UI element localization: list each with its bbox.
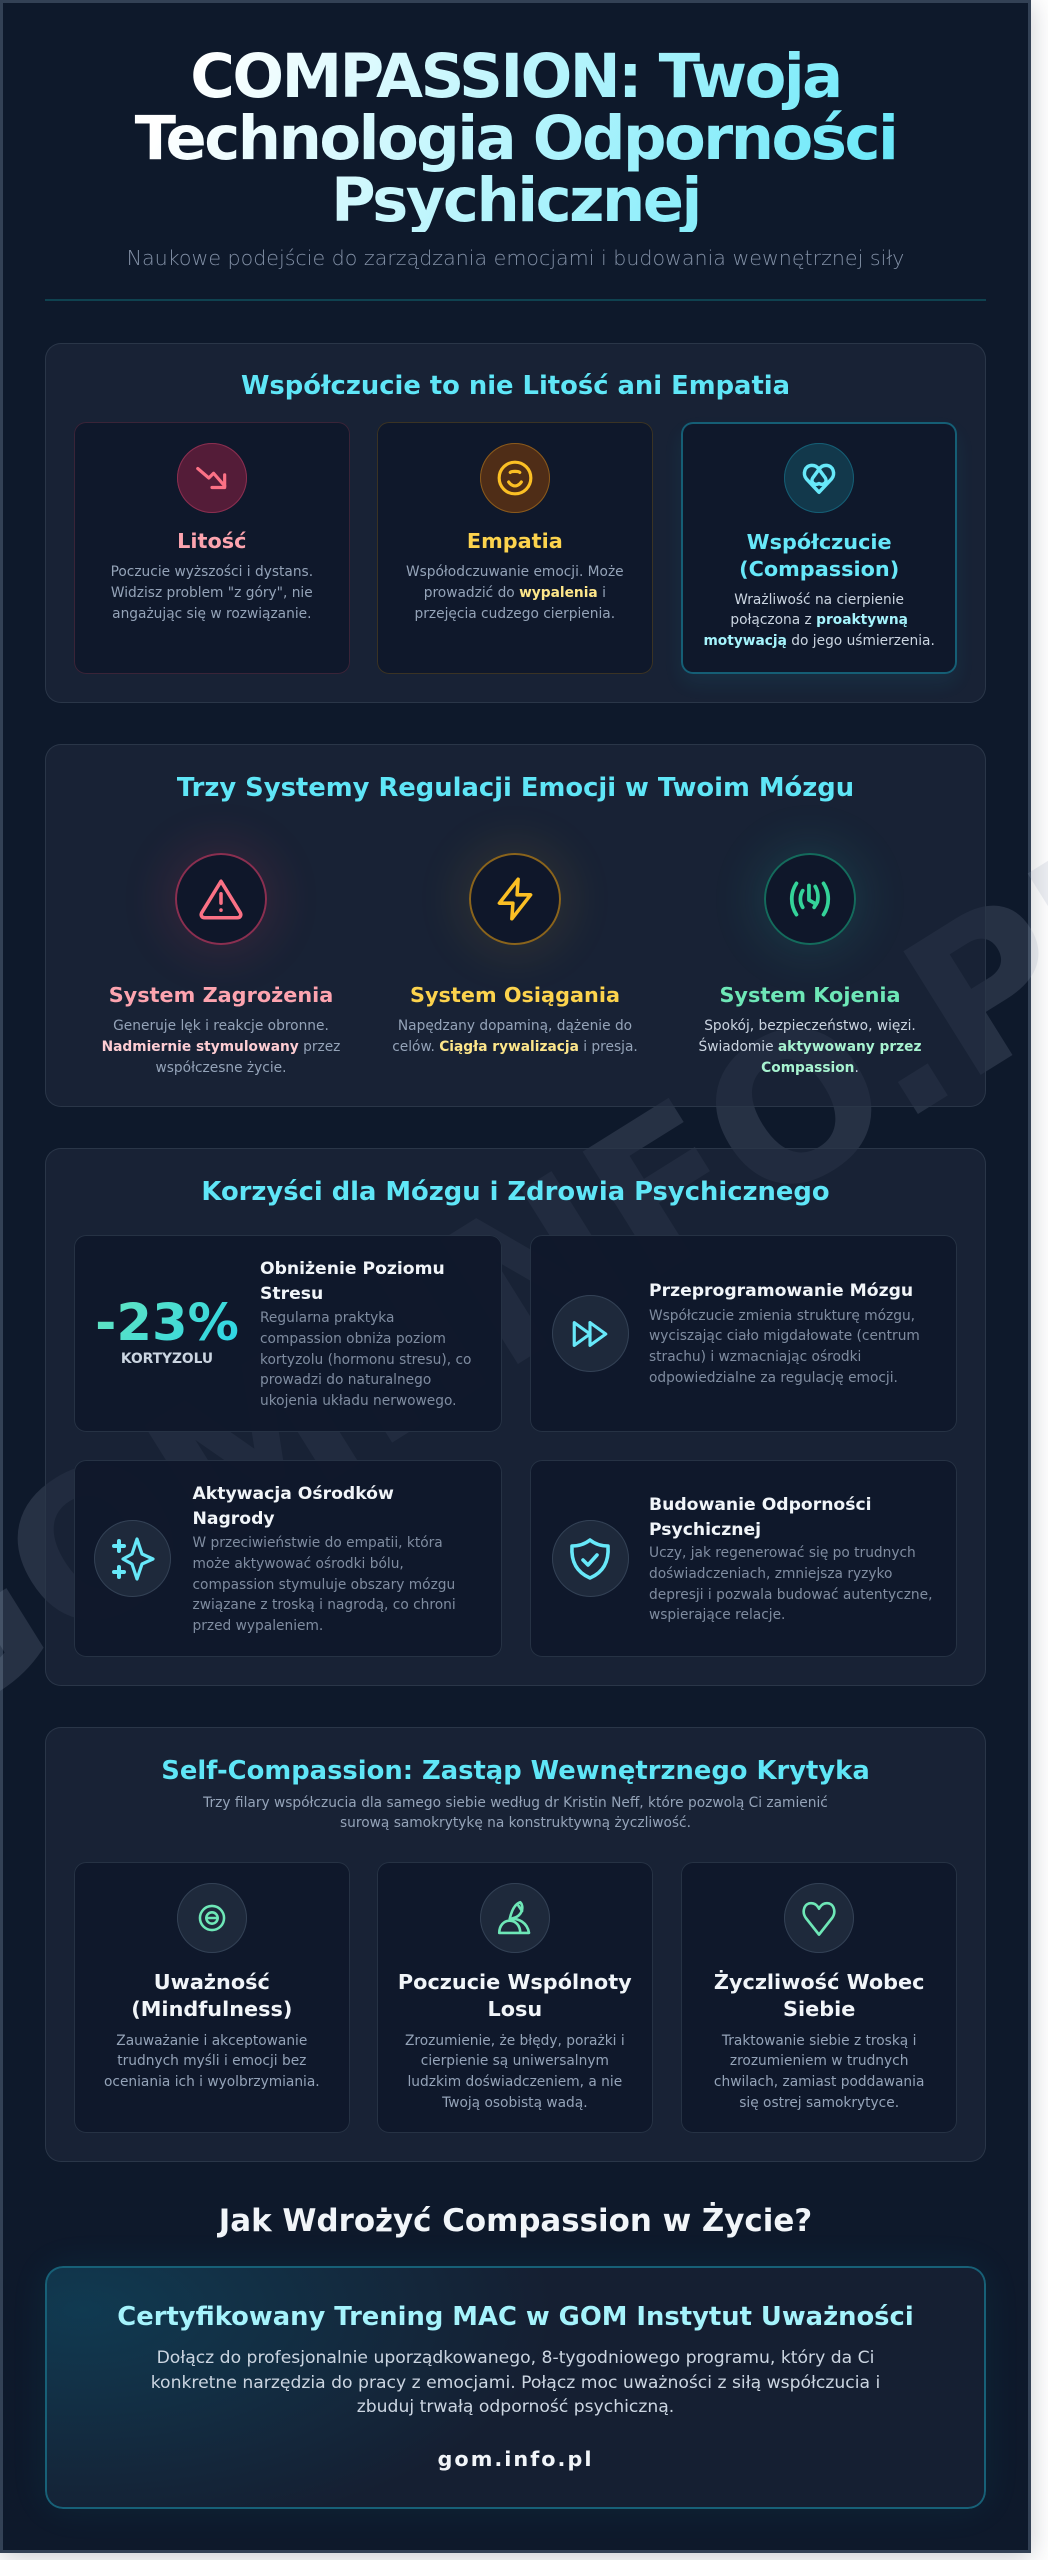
benefit title: Stresu <box>260 1284 323 1304</box>
panel heading: Trzy Systemy Regulacji Emocji w Twoim Mózgu <box>177 773 854 803</box>
panel: benefits for brain and mental health <box>45 1148 986 1686</box>
benefit: stress reduction <box>74 1235 502 1432</box>
icon: people together <box>480 1883 550 1953</box>
system text: celów. Ciągła rywalizacja i presja. <box>392 1039 638 1055</box>
card text: przejęcia cudzego cierpienia. <box>415 606 615 622</box>
benefit description: W przeciwieństwie do empatii, która <box>192 1535 443 1551</box>
header title: Psychicznej <box>331 166 700 236</box>
system text <box>102 1018 340 1076</box>
icon: smile <box>480 443 550 513</box>
card: common humanity <box>377 1862 653 2133</box>
benefit description: Regularna praktyka <box>260 1310 394 1326</box>
benefit text <box>649 1281 920 1386</box>
system title: System Zagrożenia <box>109 983 333 1007</box>
benefit title <box>649 1495 872 1540</box>
header title: COMPASSION: Twoja <box>190 42 841 112</box>
benefit: resilience <box>530 1460 957 1657</box>
cta text <box>151 2348 880 2417</box>
benefit description: compassion stymuluje obszary mózgu <box>192 1577 455 1593</box>
panel heading: Self-Compassion: Zastąp Wewnętrznego Krytyka <box>161 1756 870 1786</box>
benefit description <box>649 1545 932 1623</box>
card title: (Mindfulness) <box>131 1997 292 2021</box>
card text: Zauważanie i akceptowanie <box>116 2033 307 2049</box>
benefit text <box>192 1484 456 1634</box>
card title <box>714 1970 924 2021</box>
card: mindfulness <box>74 1862 350 2133</box>
benefit title <box>192 1484 394 1528</box>
panel intro text: surową samokrytykę na konstruktywną życzliwość. <box>340 1815 691 1831</box>
card: Litość <box>74 422 350 674</box>
panel heading: Korzyści dla Mózgu i Zdrowia Psychicznego <box>201 1177 830 1207</box>
card text: ludzkim doświadczeniem, a nie <box>407 2074 622 2090</box>
card text: cierpienie są uniwersalnym <box>421 2053 609 2069</box>
benefit text <box>260 1259 471 1409</box>
card text: chwilach, zamiast poddawania <box>714 2074 924 2090</box>
card title <box>739 530 899 581</box>
cta title: Certyfikowany Trening MAC w GOM Instytut Uważności <box>117 2302 914 2332</box>
cta link: gom.info.pl <box>438 2447 593 2471</box>
card title: Losu <box>487 1997 542 2021</box>
benefit description <box>260 1310 471 1409</box>
benefit description: Współczucie zmienia strukturę mózgu, <box>649 1308 915 1324</box>
card text: prowadzić do wypalenia i <box>424 585 606 601</box>
card title: Empatia <box>467 529 563 553</box>
benefit title: Obniżenie Poziomu <box>260 1259 445 1279</box>
system title: System Kojenia <box>719 983 901 1007</box>
card title: Życzliwość Wobec <box>714 1970 924 1994</box>
card: Współczucie <box>681 422 957 674</box>
benefit: reward centres <box>74 1460 502 1657</box>
system text: współczesne życie. <box>156 1060 286 1076</box>
benefit title: Przeprogramowanie Mózgu <box>649 1281 913 1301</box>
icon: concentric target <box>177 1883 247 1953</box>
system text: Świadomie aktywowany przez <box>698 1039 922 1055</box>
card text <box>406 564 624 622</box>
icon: heart with petals <box>784 443 854 513</box>
card text: trudnych myśli i emocji bez <box>117 2053 306 2069</box>
system text <box>392 1018 638 1055</box>
panel: self-compassion <box>45 1727 986 2162</box>
icon: shield check <box>552 1520 628 1597</box>
system text: Compassion. <box>761 1060 859 1076</box>
benefit description: związane z troską i nagrodą, co chroni <box>192 1597 456 1613</box>
system text: Spokój, bezpieczeństwo, więzi. <box>704 1018 916 1034</box>
card text: motywacją do jego uśmierzenia. <box>703 633 935 649</box>
system: threat <box>102 836 340 1076</box>
benefit description: compassion obniża poziom <box>260 1331 446 1347</box>
benefit description: odpowiedzialne za regulację emocji. <box>649 1370 898 1386</box>
benefit description: wyciszając ciało migdałowate (centrum <box>649 1328 920 1344</box>
system title: System Osiągania <box>410 983 620 1007</box>
system text <box>698 1018 922 1076</box>
cta text: konkretne narzędzia do pracy z emocjami. Połącz moc uważności z siłą współczucia i <box>151 2372 880 2392</box>
panel: three emotion regulation systems <box>45 744 986 1107</box>
header divider <box>45 299 986 301</box>
benefit title: Psychicznej <box>649 1520 761 1540</box>
card text <box>703 592 935 649</box>
card text: oceniania ich i wyolbrzymiania. <box>104 2074 320 2090</box>
card title: Litość <box>177 529 246 553</box>
benefit description: doświadczeniach, zmniejsza ryzyko <box>649 1566 892 1582</box>
card text: Zrozumienie, że błędy, porażki i <box>405 2033 625 2049</box>
card text: Twoją osobistą wadą. <box>442 2095 588 2111</box>
card title: Uważność <box>154 1970 270 1994</box>
card title: Siebie <box>783 1997 855 2021</box>
benefit description: prowadzi do naturalnego <box>260 1372 431 1388</box>
card title: Współczucie <box>747 530 892 554</box>
card text: Traktowanie siebie z troską i <box>722 2033 916 2049</box>
card text: połączona z proaktywną <box>730 612 908 628</box>
icon: trending down <box>177 443 247 513</box>
cta text: Dołącz do profesjonalnie uporządkowanego, 8-tygodniowego programu, który da Ci <box>157 2348 874 2368</box>
icon: fast forward <box>552 1295 628 1372</box>
panel: call to action <box>45 2266 986 2509</box>
benefit description: Uczy, jak regenerować się po trudnych <box>649 1545 916 1561</box>
card: Empatia <box>377 422 653 674</box>
icon: warning triangle <box>175 853 267 945</box>
benefit title: Aktywacja Ośrodków <box>192 1484 394 1504</box>
card text <box>405 2033 625 2111</box>
header title <box>0 46 1031 232</box>
card text: się ostrej samokrytyce. <box>739 2095 899 2111</box>
stat label: KORTYZOLU <box>121 1351 213 1367</box>
cta text: zbuduj trwałą odporność psychiczną. <box>357 2397 674 2417</box>
card text: Widzisz problem "z góry", nie <box>111 585 313 601</box>
card title: (Compassion) <box>739 557 899 581</box>
panel: compassion vs pity and empathy <box>45 343 986 703</box>
benefit description: depresji i pozwala budować autentyczne, <box>649 1587 932 1603</box>
system text: Napędzany dopaminą, dążenie do <box>398 1018 632 1034</box>
benefit title: Nagrody <box>192 1508 275 1528</box>
card text: Współodczuwanie emocji. Może <box>406 564 624 580</box>
system: soothing <box>698 846 922 1076</box>
card title: Poczucie Wspólnoty <box>398 1970 632 1994</box>
panel heading: Współczucie to nie Litość ani Empatia <box>241 371 790 401</box>
icon: sparkles <box>94 1520 171 1597</box>
system: drive <box>392 843 638 1055</box>
benefit text <box>649 1495 932 1623</box>
benefit title: Budowanie Odporności <box>649 1495 872 1515</box>
system text: Nadmiernie stymulowany przez <box>102 1039 340 1055</box>
benefit description: kortyzolu (hormonu stresu), co <box>260 1352 471 1368</box>
card text: zrozumieniem w trudnych <box>730 2053 908 2069</box>
panel intro text: Trzy filary współczucia dla samego siebie według dr Kristin Neff, które pozwolą Ci zamienić <box>203 1795 828 1811</box>
benefit description: strachu) i wzmacniając ośrodki <box>649 1349 861 1365</box>
benefit description <box>192 1535 456 1634</box>
card text: Poczucie wyższości i dystans. <box>111 564 313 580</box>
benefit description: ukojenia układu nerwowego. <box>260 1393 456 1409</box>
card text <box>104 2033 320 2090</box>
panel intro text <box>203 1795 828 1831</box>
benefit description <box>649 1308 920 1386</box>
header title: Technologia Odporności <box>135 104 896 174</box>
benefit description: przed wypaleniem. <box>192 1618 323 1634</box>
card text: angażując się w rozwiązanie. <box>112 606 311 622</box>
stat value: -23% <box>95 1293 239 1353</box>
card title <box>398 1970 632 2021</box>
card title <box>131 1970 292 2021</box>
card text: Wrażliwość na cierpienie <box>734 592 904 608</box>
system text: Generuje lęk i reakcje obronne. <box>113 1018 329 1034</box>
card text <box>111 564 313 622</box>
call to action heading: Jak Wdrożyć Compassion w Życie? <box>219 2203 812 2239</box>
icon: lightning bolt <box>469 853 561 945</box>
statistic -23% <box>95 1293 239 1367</box>
card: self-kindness <box>681 1862 957 2133</box>
benefit description: wspierające relacje. <box>649 1607 785 1623</box>
header subtitle: Naukowe podejście do zarządzania emocjami i budowania wewnętrznej siły <box>127 246 904 270</box>
benefit description: może aktywować ośrodki bólu, <box>192 1556 404 1572</box>
card text <box>714 2033 924 2111</box>
icon: calm signal <box>764 853 856 945</box>
benefit title <box>260 1259 445 1304</box>
icon: heart outline <box>784 1883 854 1953</box>
benefit: brain reprogramming <box>530 1235 957 1432</box>
